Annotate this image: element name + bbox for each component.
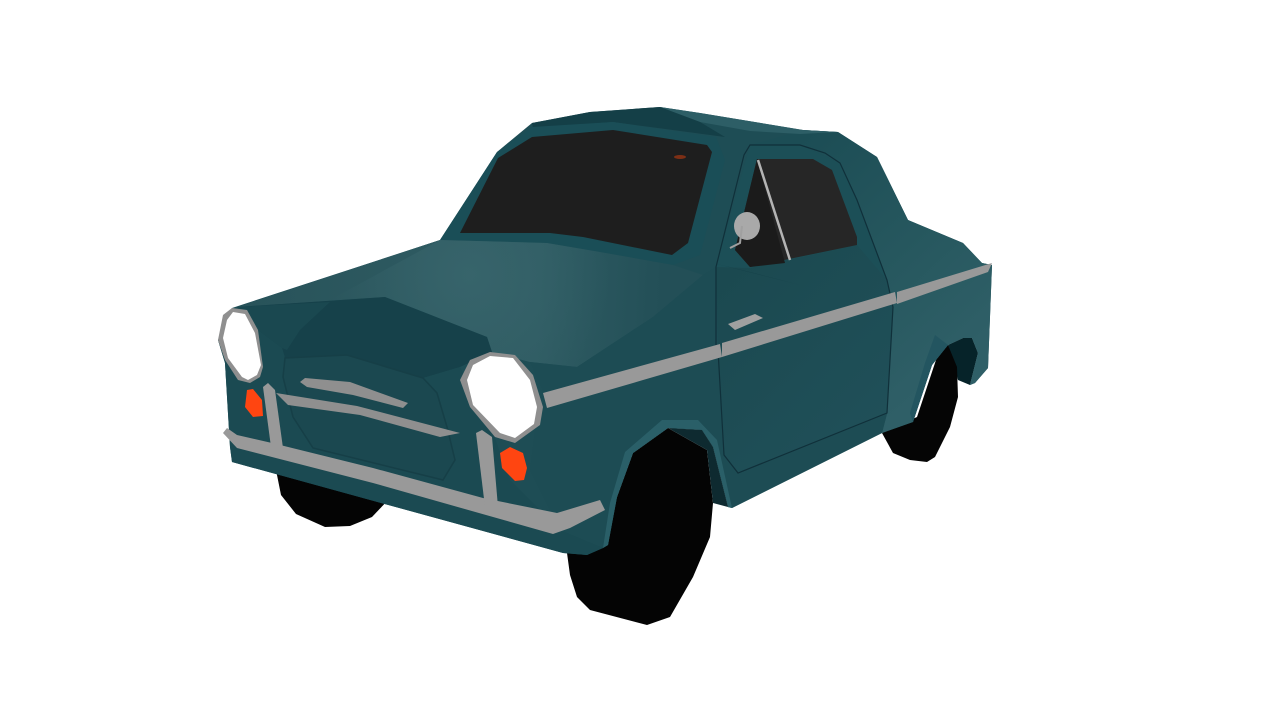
hood: front nose (237, 297, 492, 378)
bumper: main bar (223, 428, 605, 534)
wheel: rear right (882, 345, 958, 462)
bumper: left post (263, 383, 283, 448)
side window: dark quarter pane (735, 159, 785, 267)
door: upper frame (716, 145, 893, 345)
windshield: orange reflection (674, 155, 686, 159)
wheel arch trim: rear (910, 335, 948, 422)
roof: top highlight (660, 107, 838, 134)
roof: windshield frame (440, 122, 725, 265)
roof: top band above windshield (532, 107, 725, 137)
side window: chrome pillar (758, 160, 790, 260)
wheel: front right (567, 428, 713, 625)
wheel arch shadow: rear (948, 338, 978, 385)
body: front face (218, 330, 603, 555)
door: main panel (716, 245, 893, 473)
headlight: left (218, 308, 263, 383)
turn signal: left (245, 389, 263, 417)
door handle (728, 314, 763, 330)
hood: top surface (237, 240, 703, 367)
chrome side trim (543, 263, 992, 408)
roof: rear panel (750, 130, 992, 433)
windshield (460, 130, 712, 255)
side window (735, 159, 857, 267)
hood: nose left facet (237, 302, 330, 350)
body: fender side (530, 267, 718, 395)
wheel arch trim: front (603, 420, 732, 548)
front bumper (223, 383, 605, 534)
grille bar: lower (276, 393, 460, 437)
grille panel (283, 355, 455, 480)
turn signal: right (500, 447, 527, 481)
hood: soft sheen (330, 240, 640, 367)
wheels (276, 338, 978, 625)
headlight: right (460, 352, 543, 443)
side mirror (730, 212, 760, 248)
wheel arch shadow: front (668, 428, 728, 507)
car body (218, 107, 992, 555)
door: crease shadow (717, 264, 800, 285)
body: side below fender (530, 345, 887, 548)
wheel: front left (276, 470, 390, 527)
front grille bars (276, 378, 460, 437)
door lines (716, 145, 893, 473)
grille bar: upper (300, 378, 408, 408)
body: silhouette (218, 107, 992, 555)
bumper: right post (476, 430, 498, 507)
